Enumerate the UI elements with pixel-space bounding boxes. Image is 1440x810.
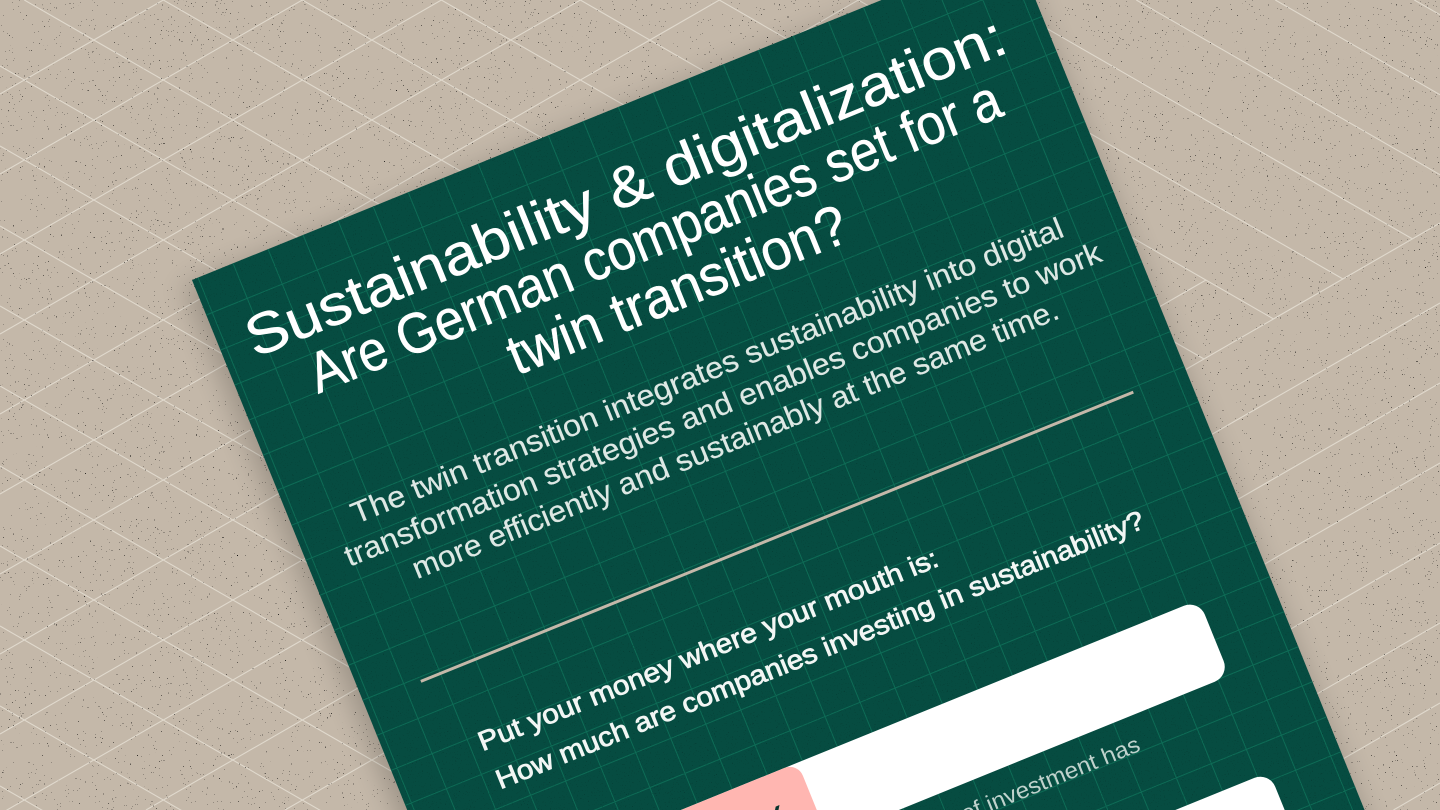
bar 1 value: [513, 763, 828, 810]
intro paragraph: The twin transition integrates sustainability into digital: [346, 212, 1068, 531]
intro paragraph: more efficiently and sustainably at the same time.: [407, 294, 1064, 586]
section heading: How much are companies investing in sustainability?: [491, 505, 1148, 795]
section heading: Put your money where your mouth is:: [474, 543, 943, 757]
title: twin transition?: [498, 192, 857, 388]
bar 1 track: [513, 600, 1230, 810]
bar 2 track: [583, 772, 1300, 810]
bar 1: [513, 600, 1230, 810]
title: Are German companies set for a: [299, 67, 1011, 406]
divider: [420, 391, 1134, 683]
intro paragraph: transformation strategies and enables companies to work: [340, 236, 1107, 573]
title: Sustainability & digitalization:: [236, 4, 1015, 370]
